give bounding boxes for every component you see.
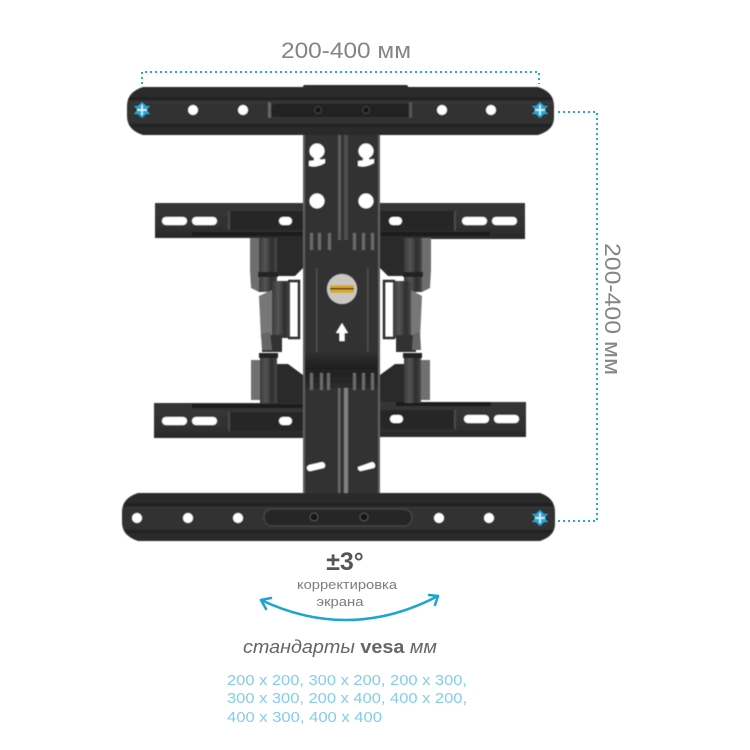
label: right height dimension: 200-400 мм: [600, 243, 625, 375]
top horizontal rail: [127, 85, 554, 135]
keyhole mounts: [307, 144, 375, 471]
text: VESA size list: 300 х 300, 200 х 400, 400 х 200,: [227, 691, 467, 707]
bottom horizontal rail: [122, 493, 555, 541]
bubble level: [327, 274, 357, 304]
label: top width dimension: 200-400 мм: [281, 38, 411, 63]
icon: up arrow: [336, 323, 348, 341]
upper horizontal arm left: [155, 203, 305, 238]
text: VESA size list: 200 х 200, 300 х 200, 200 х 300,: [227, 673, 467, 689]
text: screen correction: экрана: [316, 594, 364, 609]
heading: VESA standards: стандарты vesa мм: [243, 637, 437, 657]
icon: crosshair bottom right: [532, 510, 548, 526]
wall mount assembly: [122, 85, 555, 541]
text: screen correction: корректировка: [297, 577, 398, 592]
arrow: curved double arrow: [261, 595, 438, 620]
dimension line: height: [557, 112, 597, 521]
icon: crosshair top right: [532, 102, 548, 118]
lower horizontal arm right: [378, 402, 526, 437]
text: VESA size list: [227, 673, 467, 726]
central vertical wall plate: [303, 132, 380, 496]
articulated arm mechanism left: [250, 238, 303, 403]
heading: tilt angle: ±3°: [326, 548, 364, 576]
vents: [310, 233, 374, 390]
articulated arm mechanism right: [380, 238, 431, 403]
text: screen correction: [297, 577, 398, 609]
lower horizontal arm left: [154, 403, 304, 438]
dimension line: width: [142, 72, 539, 84]
icon: crosshair top left: [134, 102, 150, 118]
upper horizontal arm right: [378, 203, 525, 239]
text: VESA size list: 400 х 300, 400 х 400: [227, 710, 382, 726]
